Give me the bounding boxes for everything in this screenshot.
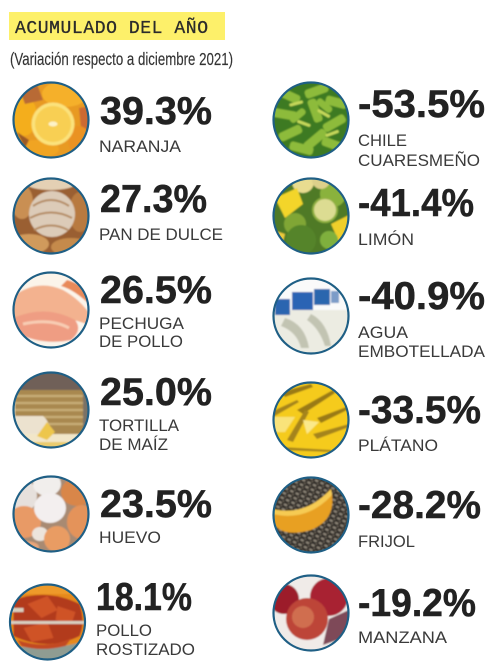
icon: pan de dulce bbox=[9, 176, 91, 256]
icon: limón bbox=[272, 177, 350, 255]
item: pan de dulce bbox=[9, 176, 223, 256]
icon: chile cuaresmeño bbox=[271, 80, 351, 160]
item: agua embotellada bbox=[271, 275, 486, 361]
label: EMBOTELLADA bbox=[358, 342, 486, 361]
label: FRIJOL bbox=[358, 532, 415, 551]
label bbox=[99, 416, 180, 454]
label: HUEVO bbox=[99, 528, 161, 547]
label: AGUA bbox=[358, 323, 409, 342]
label: CUARESMEÑO bbox=[358, 151, 480, 170]
icon: pollo rostizado bbox=[8, 582, 88, 662]
item: plátano bbox=[271, 380, 481, 460]
icon: tortilla de maíz bbox=[11, 370, 91, 450]
value: 23.5% bbox=[100, 483, 212, 526]
value: 27.3% bbox=[100, 178, 207, 221]
icon: agua embotellada bbox=[271, 276, 351, 356]
label: CHILE bbox=[358, 131, 407, 150]
label: DE MAÍZ bbox=[99, 435, 168, 454]
item: pollo rostizado bbox=[8, 576, 195, 662]
value: -19.2% bbox=[358, 582, 476, 625]
item: huevo bbox=[7, 472, 212, 554]
title: ACUMULADO DEL AÑO bbox=[15, 18, 208, 39]
icon: plátano bbox=[271, 380, 351, 460]
item: tortilla de maíz bbox=[11, 370, 212, 454]
label: MANZANA bbox=[358, 628, 448, 647]
value: -41.4% bbox=[358, 182, 474, 225]
item: chile cuaresmeño bbox=[271, 80, 485, 170]
label: PECHUGA bbox=[99, 314, 185, 333]
value: -40.9% bbox=[358, 275, 485, 318]
icon: pechuga de pollo bbox=[11, 270, 91, 350]
item: naranja bbox=[11, 80, 212, 160]
value: -33.5% bbox=[358, 389, 481, 432]
label bbox=[358, 323, 486, 361]
label bbox=[96, 621, 195, 659]
value: 26.5% bbox=[100, 269, 212, 312]
icon: manzana bbox=[269, 573, 351, 653]
label: POLLO bbox=[96, 621, 152, 640]
item: limón bbox=[271, 171, 474, 256]
label: PLÁTANO bbox=[358, 436, 438, 455]
label: NARANJA bbox=[99, 137, 182, 156]
item: pechuga de pollo bbox=[11, 269, 212, 351]
label: ROSTIZADO bbox=[96, 640, 195, 659]
subtitle: (Variación respecto a diciembre 2021) bbox=[10, 49, 233, 69]
label bbox=[358, 131, 480, 170]
label: DE POLLO bbox=[99, 332, 183, 351]
value: -28.2% bbox=[358, 484, 481, 527]
value: 18.1% bbox=[96, 576, 192, 619]
label: LIMÓN bbox=[358, 230, 414, 249]
value: 39.3% bbox=[100, 90, 212, 133]
item: manzana bbox=[269, 573, 476, 653]
label: PAN DE DULCE bbox=[99, 225, 223, 244]
label bbox=[99, 314, 185, 351]
value: -53.5% bbox=[358, 83, 485, 126]
title bbox=[9, 12, 225, 40]
icon: huevo bbox=[12, 475, 90, 553]
icon: frijol bbox=[271, 475, 351, 555]
item: frijol bbox=[271, 475, 481, 555]
value: 25.0% bbox=[100, 371, 212, 414]
label: TORTILLA bbox=[99, 416, 180, 435]
icon: naranja bbox=[11, 80, 91, 160]
